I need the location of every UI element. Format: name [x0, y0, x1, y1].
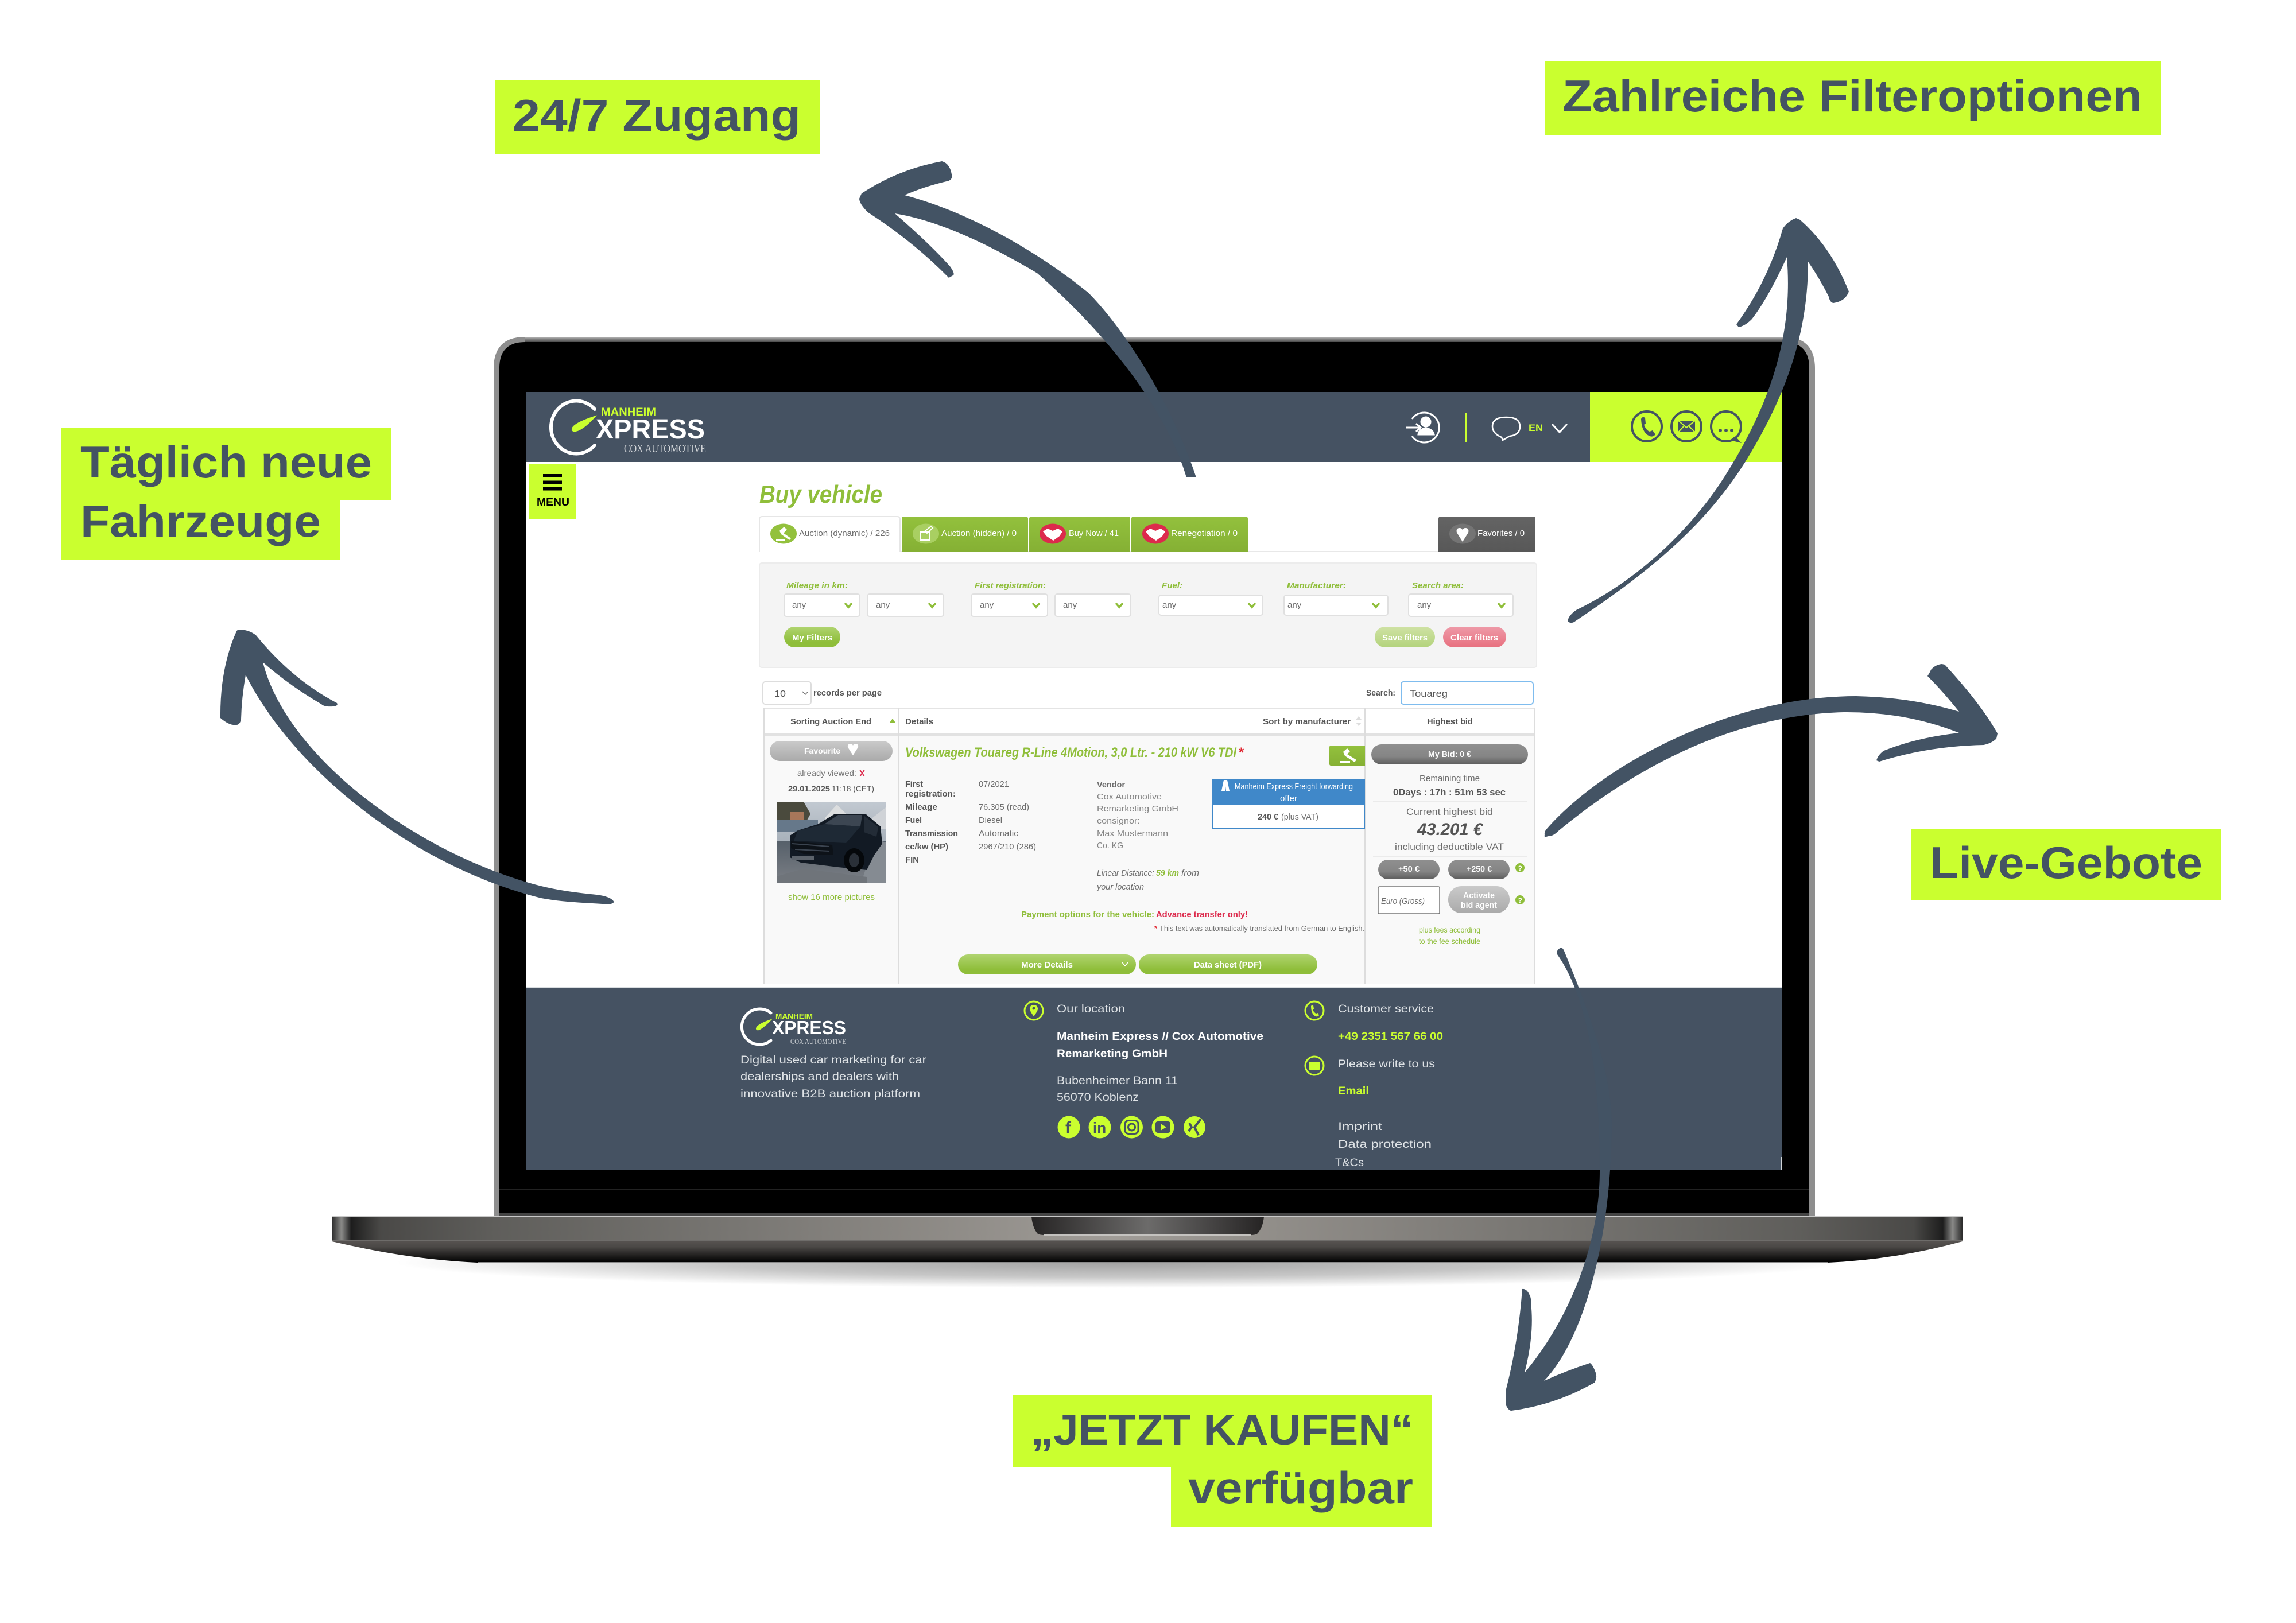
menu button [529, 464, 576, 519]
spec table: FIN [905, 855, 919, 865]
spec table: cc/kw (HP) [905, 842, 948, 852]
tabs [759, 517, 1535, 552]
footer contact: Data protection [1338, 1139, 1432, 1151]
spec table: 2967/210 (286) [979, 842, 1036, 852]
button: Data sheet: Data sheet (PDF) [1194, 960, 1262, 970]
button: Activate bid agent: Activate [1463, 891, 1495, 900]
filter dropdowns: any [1417, 600, 1432, 610]
already viewed: already viewed: [797, 768, 856, 778]
table header: Highest bid [1427, 717, 1473, 727]
button: Data sheet [1139, 954, 1317, 974]
logo: Manheim Express: XPRESS [596, 414, 705, 445]
button: Favourite [770, 741, 893, 761]
icon: mail [1305, 1057, 1324, 1075]
table header: Details [905, 717, 933, 727]
records per page: 10 [774, 689, 786, 699]
search box: Search: [1366, 688, 1395, 698]
button: Favourite: Favourite [804, 746, 840, 755]
divider [1465, 413, 1467, 442]
footer address: Our location [1057, 1003, 1125, 1015]
vendor block: Cox Automotive [1097, 792, 1162, 802]
fee note [1419, 925, 1480, 946]
spec table [905, 779, 1036, 865]
linear distance: your location [1096, 882, 1144, 892]
label: JETZT KAUFEN verfügbar [1013, 1395, 1432, 1527]
button: My Bid: My Bid: 0 € [1428, 750, 1472, 759]
current highest bid [1395, 806, 1504, 852]
button: +250 [1448, 860, 1510, 879]
linear distance: Linear Distance: [1097, 868, 1154, 878]
table header [790, 716, 1473, 727]
table header: Sorting Auction End [790, 717, 871, 727]
label: Zahlreiche Filteroptionen: Zahlreiche Filteroptionen [1562, 71, 2142, 121]
arrow: to 24/7 Zugang [859, 161, 1196, 477]
show more pictures: show 16 more pictures [788, 892, 875, 902]
tab: Auction hidden [902, 517, 1028, 552]
button: Clear filters [1443, 627, 1506, 647]
vehicle table [763, 708, 1535, 984]
filter dropdowns [784, 594, 1513, 616]
footer description: innovative B2B auction platform [740, 1088, 920, 1100]
translation note: This text was automatically translated from German to English. [1159, 924, 1364, 933]
vehicle title: * [1238, 745, 1244, 760]
help icon [1515, 863, 1525, 872]
column: bid panel [1371, 744, 1528, 946]
auction badge [1329, 746, 1365, 766]
tab: Favorites [1438, 517, 1535, 552]
footer contact: Please write to us [1338, 1058, 1435, 1070]
footer description: Digital used car marketing for car [740, 1054, 927, 1066]
label: Live-Gebote: Live-Gebote [1930, 837, 2202, 888]
button: +50: +50 € [1398, 864, 1420, 874]
icon: language bubble [1492, 417, 1520, 440]
icon: mail [1671, 411, 1701, 441]
date: 29.01.2025 [788, 784, 830, 793]
screen [526, 392, 1782, 1170]
logo: Manheim Express: MANHEIM [601, 406, 656, 418]
laptop [332, 337, 1963, 1288]
footer contact [1335, 1003, 1443, 1169]
spec table: First [905, 779, 923, 789]
icon: phone [1632, 411, 1662, 441]
vehicle title: Volkswagen Touareg R-Line 4Motion, 3,0 Ltr. - 210 kW V6 TDI [905, 745, 1237, 760]
vendor block: Remarketing GmbH [1097, 804, 1178, 814]
photo: car [777, 802, 886, 883]
spec table: registration: [905, 789, 956, 799]
laptop lid [494, 337, 1815, 1216]
current highest bid: Current highest bid [1406, 806, 1493, 817]
filter labels: First registration: [975, 581, 1046, 591]
footer address [1057, 1003, 1263, 1104]
footer contact: +49 2351 567 66 00 [1338, 1031, 1443, 1043]
site footer [526, 987, 1782, 1170]
tab: Auction dynamic [759, 517, 900, 552]
spec table: Fuel [905, 816, 922, 825]
filter dropdowns: any [1162, 600, 1177, 610]
search box: Touareg [1410, 688, 1448, 699]
button: Activate bid agent: bid agent [1461, 900, 1497, 910]
freight forwarding box [1212, 779, 1365, 828]
vendor block [1097, 780, 1178, 851]
fee note: plus fees according [1419, 925, 1480, 934]
column: vehicle details [905, 745, 1365, 974]
filter panel [759, 563, 1537, 667]
footer contact: Email [1338, 1085, 1369, 1097]
button: My Bid [1371, 744, 1528, 764]
social icons [1057, 1116, 1205, 1139]
footer address: 56070 Koblenz [1057, 1092, 1139, 1104]
logo: Manheim Express: COX AUTOMOTIVE [624, 442, 706, 455]
button: +250: +250 € [1467, 864, 1492, 874]
vendor block: Max Mustermann [1097, 829, 1168, 838]
filter dropdowns: any [792, 600, 806, 610]
table header: Sort by manufacturer [1263, 717, 1351, 727]
button: More Details: More Details [1021, 960, 1073, 970]
records per page: records per page [813, 688, 882, 698]
heading: Buy vehicle: Buy vehicle [759, 480, 882, 508]
help icon: ? [1518, 896, 1522, 904]
footer address: Remarketing GmbH [1057, 1048, 1168, 1060]
spec table: Mileage [905, 802, 937, 812]
footer description [740, 1054, 927, 1100]
filter dropdowns: any [980, 600, 994, 610]
already viewed: X [859, 769, 865, 779]
label: 24/7 Zugang [495, 80, 820, 154]
payment options: Advance transfer only! [1156, 910, 1248, 919]
label: Zahlreiche Filteroptionen [1545, 61, 2161, 135]
tab: Renegotiation [1131, 517, 1248, 552]
tab: Renegotiation: Renegotiation / 0 [1171, 529, 1238, 538]
freight forwarding box: (plus VAT) [1281, 812, 1318, 822]
remaining time: 0Days : 17h : 51m 53 sec [1393, 787, 1506, 798]
footer logo: XPRESS [772, 1017, 846, 1038]
footer logo: MANHEIM [775, 1012, 813, 1020]
translation note: * [1154, 924, 1158, 933]
label: JETZT KAUFEN verfügbar: „JETZT KAUFEN“ [1031, 1405, 1413, 1454]
button: Save filters: Save filters [1382, 633, 1428, 643]
arrow: to Täglich neue Fahrzeuge [220, 630, 614, 904]
payment options [1021, 910, 1248, 919]
tab: Buy Now: Buy Now / 41 [1069, 529, 1119, 538]
label: Täglich neue Fahrzeuge: Täglich neue [80, 437, 372, 487]
filter labels: Search area: [1412, 581, 1464, 591]
label: Täglich neue Fahrzeuge [61, 428, 391, 560]
arrow: to Zahlreiche Filteroptionen [1568, 218, 1849, 623]
column: favourite and photo [770, 741, 893, 902]
date [788, 784, 874, 793]
help icon [1515, 895, 1525, 904]
label: JETZT KAUFEN verfügbar: verfügbar [1188, 1462, 1413, 1513]
arrow: to JETZT KAUFEN [1506, 948, 1612, 1411]
icon: chat [1711, 411, 1742, 443]
footer contact: Imprint [1338, 1121, 1383, 1133]
button: My Filters [784, 627, 840, 647]
footer logo: COX AUTOMOTIVE [790, 1037, 846, 1046]
spec table: Diesel [979, 816, 1002, 825]
footer description: dealerships and dealers with [740, 1071, 899, 1083]
fee note: to the fee schedule [1419, 937, 1480, 946]
records per page [763, 682, 882, 704]
date: 11:18 (CET) [832, 784, 874, 793]
filter labels: Mileage in km: [786, 581, 848, 591]
vendor block: Vendor [1097, 780, 1125, 790]
search box [1366, 682, 1533, 704]
button: Activate bid agent [1448, 886, 1510, 913]
current highest bid: 43.201 € [1417, 820, 1483, 839]
laptop shadow [396, 1237, 1843, 1288]
language selector: EN [1529, 422, 1543, 433]
payment options: Payment options for the vehicle: [1021, 910, 1154, 919]
input: Euro gross: Euro (Gross) [1381, 896, 1425, 906]
footer contact: T&Cs [1335, 1157, 1364, 1169]
help icon: ? [1518, 864, 1522, 872]
linear distance: from [1181, 868, 1199, 878]
footer contact: Customer service [1338, 1003, 1434, 1015]
tab: Favorites: Favorites / 0 [1477, 529, 1525, 538]
button: Save filters [1375, 627, 1435, 647]
vendor block: consignor: [1097, 816, 1140, 826]
filter dropdowns: any [1287, 600, 1302, 610]
linear distance: 59 km [1156, 868, 1179, 878]
button: Clear filters: Clear filters [1450, 633, 1498, 643]
icon: location [1025, 1001, 1043, 1020]
tab: Auction dynamic: Auction (dynamic) / 226 [799, 529, 890, 538]
logo: Manheim Express [551, 401, 706, 455]
footer address: Manheim Express // Cox Automotive [1057, 1031, 1263, 1043]
language selector [1529, 422, 1567, 433]
laptop base [332, 1216, 1963, 1263]
button: My Filters: My Filters [792, 633, 832, 643]
remaining time [1393, 774, 1506, 798]
spec table: 76.305 (read) [979, 802, 1029, 812]
spec table: Automatic [979, 829, 1019, 838]
filter labels: Fuel: [1162, 581, 1182, 591]
vendor block: Co. KG [1097, 841, 1123, 851]
arrow: to Live-Gebote [1545, 664, 1998, 837]
freight forwarding box: Manheim Express Freight forwarding [1235, 782, 1353, 791]
freight forwarding box: offer [1280, 794, 1297, 803]
footer address: Bubenheimer Bann 11 [1057, 1075, 1178, 1087]
tab: Auction hidden: Auction (hidden) / 0 [941, 529, 1017, 538]
current highest bid: including deductible VAT [1395, 841, 1504, 852]
spec table: 07/2021 [979, 779, 1009, 789]
social icons: f [1065, 1119, 1072, 1137]
social icons: in [1093, 1119, 1106, 1136]
filter dropdowns: any [1063, 600, 1077, 610]
label: Live-Gebote [1911, 829, 2221, 900]
button: +50 [1378, 860, 1440, 879]
filter labels: Manufacturer: [1287, 581, 1346, 591]
icon: phone [1305, 1001, 1324, 1020]
site header [526, 392, 1782, 462]
freight forwarding box: 240 € [1258, 812, 1279, 822]
filter labels [786, 581, 1464, 591]
menu button: MENU [537, 496, 569, 508]
button: More Details [958, 954, 1136, 974]
spec table: Transmission [905, 829, 958, 838]
icon: user login [1406, 413, 1439, 442]
label: Täglich neue Fahrzeuge: Fahrzeuge [80, 496, 321, 546]
footer logo [742, 1009, 846, 1046]
tab: Buy Now [1029, 517, 1130, 552]
filter dropdowns: any [876, 600, 890, 610]
label: 24/7 Zugang: 24/7 Zugang [513, 90, 801, 141]
remaining time: Remaining time [1420, 774, 1480, 783]
linear distance [1096, 868, 1199, 892]
input: Euro gross [1378, 887, 1440, 914]
